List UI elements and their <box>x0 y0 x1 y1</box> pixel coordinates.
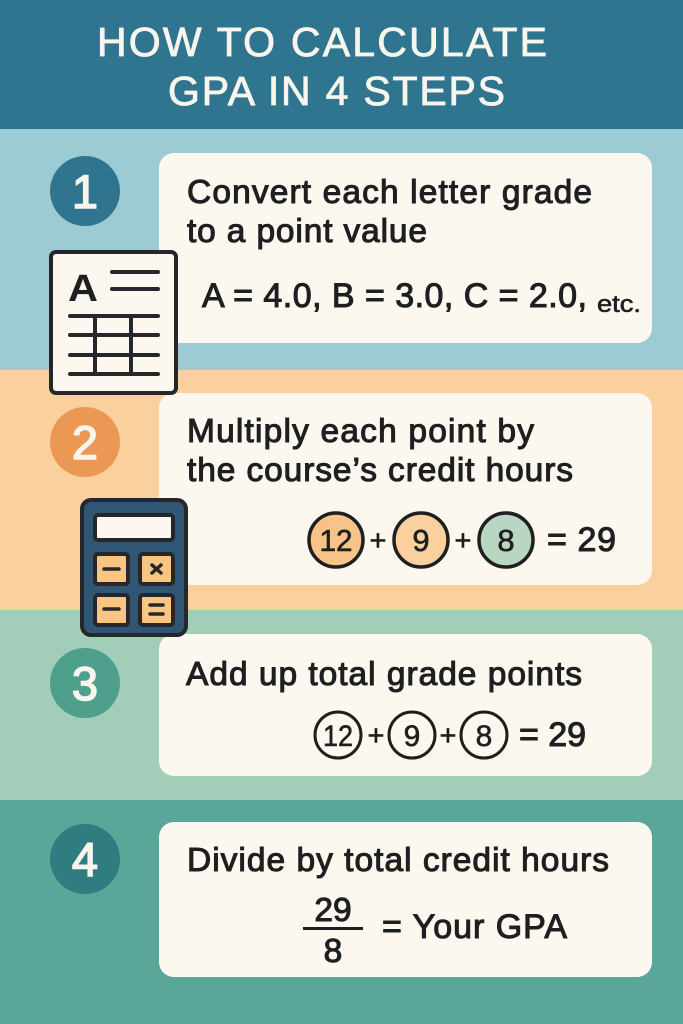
fraction: 29 <box>314 892 352 929</box>
step 1 heading line 2: to a point value <box>187 213 427 250</box>
grade values: A = 4.0, B = 3.0, C = 2.0, <box>202 277 587 315</box>
panel: step 1 card <box>159 153 652 343</box>
icon: calculator <box>82 500 186 635</box>
badge: step 3: 3 <box>72 657 98 710</box>
equation: coloured <box>309 513 616 567</box>
panel: step 3 band <box>0 610 683 800</box>
panel: step 4 card <box>159 822 652 977</box>
badge: step 4 <box>50 824 120 894</box>
header <box>0 0 683 129</box>
panel: step 2 band <box>0 370 683 610</box>
equation: outlined: 9 <box>404 720 420 753</box>
fraction <box>303 892 363 970</box>
icon: grade sheet: A <box>68 268 98 310</box>
equation: coloured: = 29 <box>547 521 616 559</box>
result: = Your GPA <box>382 908 567 946</box>
panel: step 1 band <box>0 129 683 370</box>
step 2 heading line 2: the course’s credit hours <box>187 452 573 489</box>
badge: step 2: 2 <box>72 416 98 469</box>
equation: coloured: + <box>370 525 386 557</box>
equation: coloured: 9 <box>412 523 430 558</box>
equation: outlined: + <box>440 720 456 752</box>
etc label: etc. <box>597 291 641 318</box>
step 1 heading: Convert each letter grade <box>187 174 592 211</box>
equation: outlined: 8 <box>476 720 492 753</box>
panel: step 2 card <box>159 393 652 585</box>
fraction: 8 <box>324 933 342 970</box>
title line 2: GPA IN 4 STEPS <box>168 68 505 114</box>
badge: step 1 <box>50 156 120 226</box>
badge: step 4: 4 <box>72 833 98 886</box>
title line 1: HOW TO CALCULATE <box>97 19 547 65</box>
equation: outlined: + <box>368 720 384 752</box>
badge: step 1: 1 <box>72 165 98 218</box>
equation: coloured: 8 <box>497 523 515 558</box>
equation: coloured: + <box>455 525 471 557</box>
panel: step 4 band <box>0 800 683 1024</box>
icon: grade sheet <box>51 252 176 393</box>
badge: step 3 <box>50 648 120 718</box>
equation: outlined <box>315 712 586 758</box>
equation: outlined: = 29 <box>519 716 586 754</box>
step 4 heading: Divide by total credit hours <box>187 842 609 879</box>
equation: coloured: 12 <box>320 523 352 558</box>
equation: outlined: 12 <box>323 720 353 753</box>
step 2 heading: Multiply each point by <box>187 413 534 450</box>
badge: step 2 <box>50 407 120 477</box>
panel: step 3 card <box>159 634 652 776</box>
step 3 heading: Add up total grade points <box>186 656 582 693</box>
